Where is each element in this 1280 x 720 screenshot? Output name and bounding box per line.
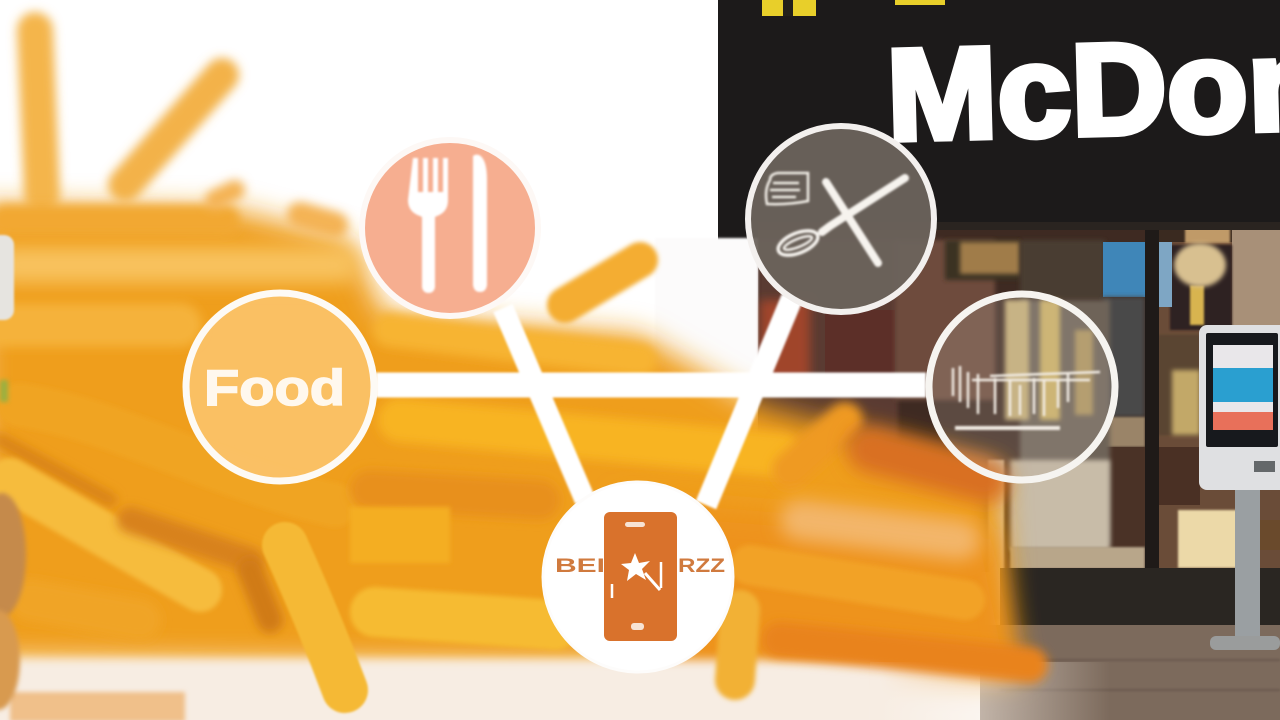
icon: burger [766, 173, 808, 204]
node: Food [186, 293, 374, 481]
self-service kiosk [1199, 325, 1280, 650]
icon: fork [408, 158, 448, 293]
horizontal connector [376, 372, 926, 398]
node: fork and knife [362, 140, 538, 316]
icon: crossed spatula and whisk [775, 178, 905, 263]
node: burger and utensils [748, 126, 934, 312]
white wall patch [655, 238, 758, 372]
icon: knife [473, 155, 487, 292]
icon: restaurant front [953, 366, 1100, 428]
node: restaurant [929, 294, 1115, 480]
storefront sign: yellow accents [762, 0, 945, 16]
connector lines between nodes [376, 298, 926, 505]
text: app name left: BEI [555, 556, 605, 577]
text: app name right: RZZ [678, 556, 725, 577]
node: mobile app [543, 482, 733, 672]
background: McDonald's storefront [718, 0, 1280, 720]
connector: cutlery to phone [503, 308, 585, 500]
connector: tools to phone [706, 298, 792, 505]
label: Food: Food [204, 360, 345, 416]
icon: smartphone [604, 512, 677, 641]
